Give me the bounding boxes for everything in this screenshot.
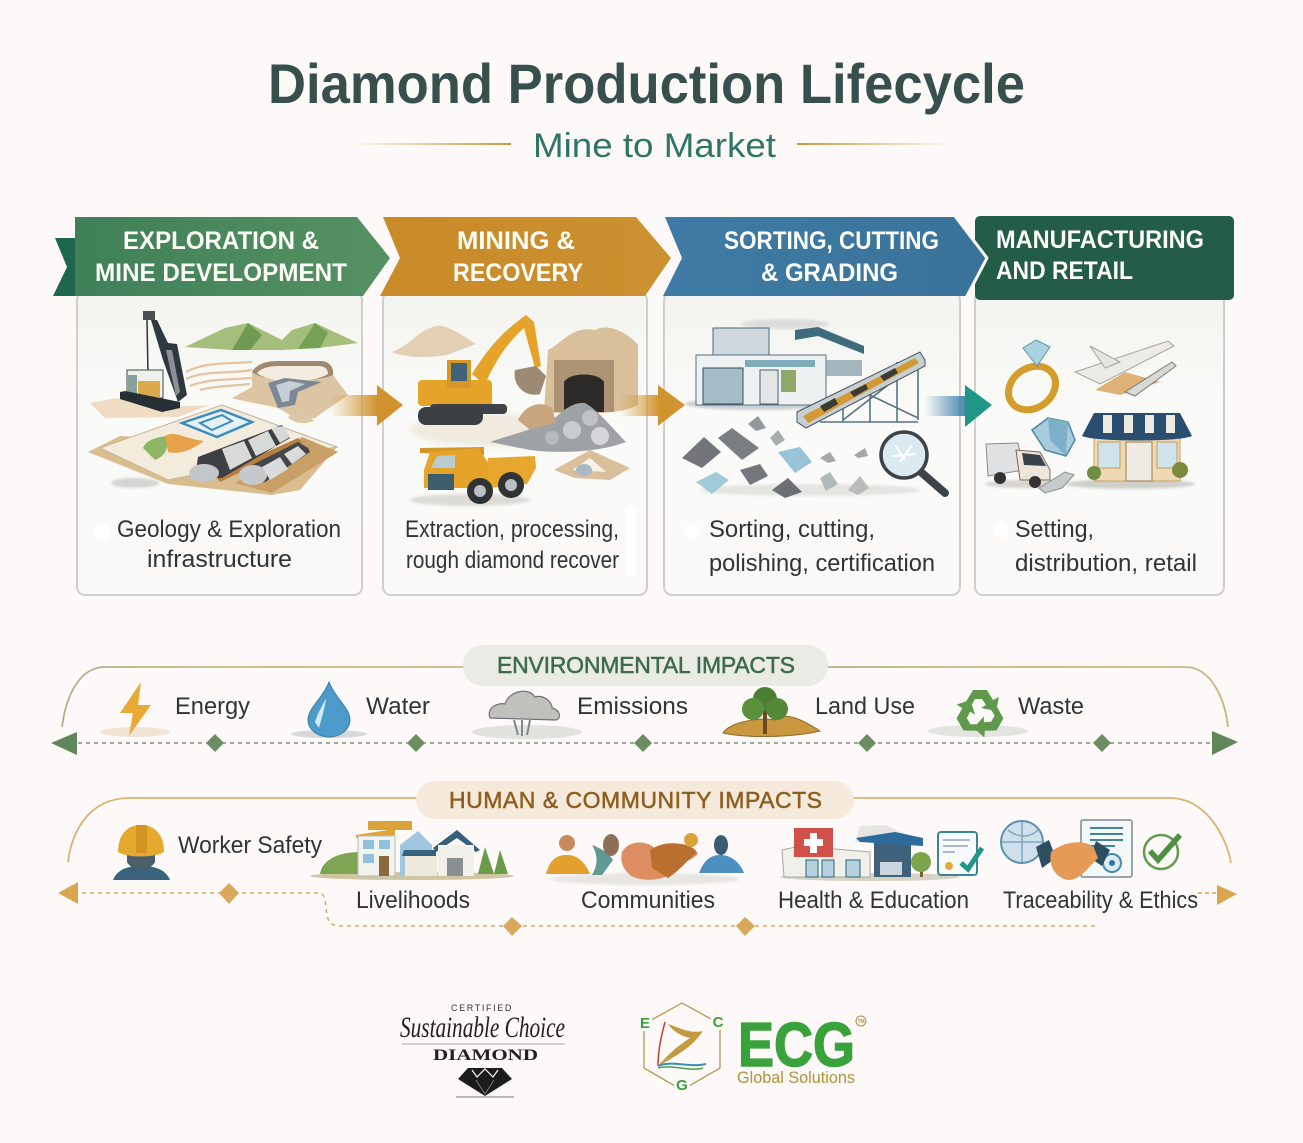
item: livelihoods: [310, 821, 514, 914]
logo: Sustainable Choice Diamond: CERTIFIED: [451, 1003, 513, 1013]
core samples: [189, 425, 338, 493]
item: livelihoods: Livelihoods: [356, 887, 470, 914]
caption: distribution, retail: [1015, 550, 1197, 577]
delivery truck: [985, 443, 1065, 488]
item: communities: [546, 833, 744, 914]
item: waste: [928, 690, 1084, 741]
trademark: [856, 1016, 866, 1026]
plane: [1075, 341, 1176, 396]
hexagon mark: G: [676, 1077, 688, 1094]
illustration: retail: [985, 340, 1195, 493]
sand under drill: [90, 398, 210, 418]
rough stones: [682, 416, 920, 498]
drill rig: [120, 311, 187, 412]
contour sketch: [186, 362, 252, 390]
arrow: mining to sorting: [620, 385, 685, 426]
caption: Sorting, cutting,: [709, 516, 875, 543]
logo: ECG Global Solutions: ECG: [738, 1011, 855, 1080]
sand heap: [392, 326, 476, 357]
item: land use: [723, 687, 915, 737]
large diamond: [1032, 418, 1075, 456]
illustration: mining: [392, 315, 638, 506]
caption: [94, 516, 341, 573]
item: communities: Communities: [581, 887, 715, 914]
pill heading: [416, 781, 854, 819]
panel: sorting, cutting and grading: [663, 216, 987, 595]
hexagon mark: [637, 1003, 726, 1094]
blueprint: [182, 410, 252, 437]
caption: [993, 516, 1197, 577]
item: waste: Waste: [1018, 693, 1084, 720]
dotted timeline: [51, 731, 1238, 755]
ribbon tail: [53, 238, 80, 296]
hexagon mark: E: [640, 1015, 650, 1032]
logo: ECG Global Solutions: [637, 1003, 866, 1094]
item: land use: Land Use: [815, 693, 915, 720]
section: environmental impacts: [51, 645, 1238, 755]
banner heading: RECOVERY: [453, 259, 583, 287]
section: human and community impacts: [58, 781, 1237, 936]
banner heading: [724, 227, 939, 287]
diamond emblem: [456, 1068, 514, 1097]
banner heading: AND RETAIL: [996, 257, 1133, 285]
banner: [75, 217, 390, 296]
banner heading: MINING &: [457, 227, 575, 255]
banner heading: [453, 227, 583, 287]
arrow: sorting to retail: [925, 385, 992, 427]
caption: polishing, certification: [709, 550, 935, 577]
storefront: [1065, 413, 1195, 489]
banner heading: MANUFACTURING: [996, 226, 1204, 254]
logo: Sustainable Choice Diamond: Sustainable Choice: [400, 1011, 565, 1044]
banner: [663, 217, 985, 296]
banner heading: SORTING, CUTTING: [724, 227, 939, 255]
soft shadow: [111, 478, 159, 488]
item: traceability and ethics: [1001, 820, 1198, 914]
magnifying glass: [881, 432, 945, 493]
title: Diamond Production Lifecycle: [268, 52, 1025, 115]
illustration: sorting: [682, 319, 945, 498]
caption: [684, 516, 935, 577]
silver piece: [1039, 472, 1074, 493]
factory: [685, 327, 864, 410]
logo: Sustainable Choice Diamond: DIAMOND: [433, 1047, 538, 1064]
logo: ECG Global Solutions: Global Solutions: [737, 1068, 855, 1087]
pill heading: ENVIRONMENTAL IMPACTS: [497, 652, 795, 678]
caption: Geology & Exploration: [117, 516, 341, 543]
item: worker safety: [113, 825, 323, 880]
smoke: [740, 319, 830, 329]
banner heading: & GRADING: [761, 259, 898, 287]
pill heading: HUMAN & COMMUNITY IMPACTS: [449, 787, 822, 813]
item: emissions: Emissions: [577, 693, 688, 720]
panel: manufacturing and retail: [975, 216, 1234, 595]
trademark: TM: [858, 1019, 865, 1025]
mountains: [185, 323, 358, 350]
subtitle: Mine to Market: [533, 127, 777, 165]
item: worker safety: Worker Safety: [178, 832, 323, 859]
panel: exploration and mine development: [53, 217, 390, 595]
item: health and education: [778, 825, 982, 914]
card body: [664, 292, 960, 595]
caption: Setting,: [1015, 516, 1094, 543]
card body: [975, 292, 1224, 595]
caption: [405, 505, 636, 577]
ring: [1000, 340, 1064, 419]
item: health and education: Health & Education: [778, 887, 969, 914]
banner tip halo: [955, 216, 987, 298]
item: energy: [100, 682, 251, 737]
small rock mound: [554, 450, 630, 480]
hexagon mark: C: [713, 1014, 724, 1031]
item: traceability and ethics: Traceability & Ethics: [1003, 887, 1198, 914]
item: energy: Energy: [175, 693, 251, 720]
item: emissions: [472, 691, 688, 739]
arrow: exploration to mining: [330, 385, 403, 426]
banner heading: MINE DEVELOPMENT: [95, 259, 347, 287]
map patches: [143, 436, 167, 460]
card body: [383, 292, 647, 595]
map sheets: [88, 405, 337, 495]
banner heading: [996, 226, 1204, 285]
ground shade: [410, 414, 590, 446]
connector arc: [68, 798, 1231, 863]
caption: Extraction, processing,: [405, 516, 619, 543]
item: water: Water: [366, 693, 430, 720]
illustration: exploration: [88, 311, 358, 495]
item: water: [291, 682, 430, 738]
tunnel: [544, 328, 638, 414]
logo: Sustainable Choice Diamond: [400, 1003, 565, 1097]
card body: [77, 292, 362, 595]
connector arc: [62, 667, 1228, 727]
rock pile: [490, 403, 626, 452]
open pit: [232, 361, 348, 423]
banner heading: EXPLORATION &: [123, 227, 319, 255]
excavator: [418, 315, 546, 425]
caption: infrastructure: [147, 546, 292, 573]
people: [559, 835, 575, 851]
conveyor: [797, 352, 925, 428]
caption: rough diamond recover: [406, 547, 619, 574]
pill heading: [463, 645, 828, 686]
banner: [975, 216, 1234, 300]
banner heading: [95, 227, 347, 287]
panel: mining and recovery: [380, 217, 671, 595]
banner: [380, 217, 671, 296]
dashed timeline: [58, 882, 1237, 936]
dump truck: [410, 447, 536, 506]
